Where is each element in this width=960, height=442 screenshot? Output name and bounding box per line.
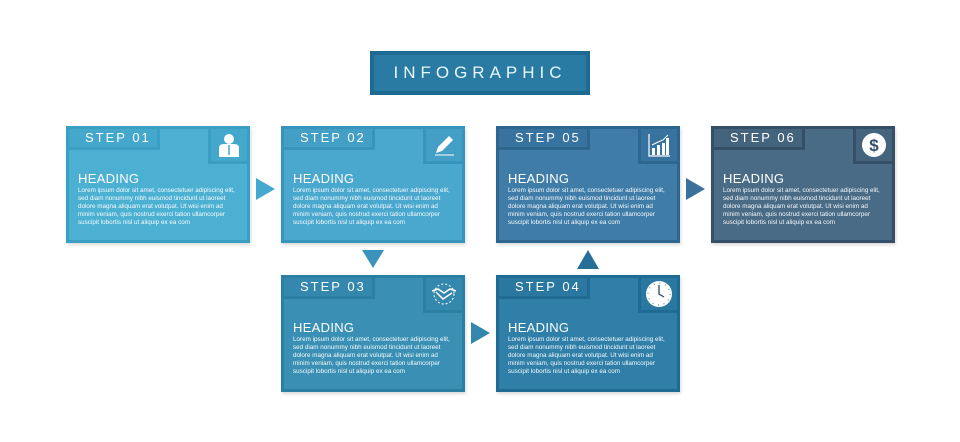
text: Lorem ipsum dolor sit amet, consectetuer adipiscing elit, — [293, 187, 450, 194]
text: dolore magna aliquam erat volutpat. Ut wisi enim ad — [508, 203, 653, 210]
text — [723, 187, 880, 226]
text: dolore magna aliquam erat volutpat. Ut wisi enim ad — [78, 203, 223, 210]
heading: HEADING — [723, 171, 784, 186]
text: minim veniam, quis nostrud exerci tation ullamcorper — [508, 211, 655, 218]
text: minim veniam, quis nostrud exerci tation ullamcorper — [293, 360, 440, 367]
step label 02 — [281, 126, 375, 150]
panel: step 01 — [66, 126, 250, 243]
text: dolore magna aliquam erat volutpat. Ut wisi enim ad — [293, 352, 438, 359]
text: suscipit lobortis nisl ut aliquip ex ea com — [508, 368, 620, 375]
step label 05 — [496, 126, 590, 150]
text — [508, 187, 665, 226]
text: Lorem ipsum dolor sit amet, consectetuer adipiscing elit, — [508, 187, 665, 194]
text — [293, 187, 450, 226]
heading: HEADING — [508, 320, 569, 335]
text: sed diam nonummy nibh euismod tincidunt ut laoreet — [293, 195, 440, 202]
panel: step 02 — [281, 126, 465, 243]
text: sed diam nonummy nibh euismod tincidunt ut laoreet — [293, 344, 440, 351]
text: Lorem ipsum dolor sit amet, consectetuer adipiscing elit, — [723, 187, 880, 194]
icon: pencil — [423, 126, 465, 164]
title: INFOGRAPHIC — [393, 63, 567, 82]
step label 03: STEP 03 — [300, 279, 366, 294]
step label 02: STEP 02 — [300, 130, 366, 145]
text: minim veniam, quis nostrud exerci tation ullamcorper — [508, 360, 655, 367]
icon: person — [208, 126, 250, 164]
step label 04: STEP 04 — [515, 279, 581, 294]
text: Lorem ipsum dolor sit amet, consectetuer adipiscing elit, — [293, 336, 450, 343]
step label 03 — [281, 275, 375, 299]
heading: HEADING — [508, 171, 569, 186]
text: dolore magna aliquam erat volutpat. Ut wisi enim ad — [508, 352, 653, 359]
text: Lorem ipsum dolor sit amet, consectetuer adipiscing elit, — [78, 187, 235, 194]
text: Lorem ipsum dolor sit amet, consectetuer adipiscing elit, — [508, 336, 665, 343]
arrow: 2 to 3 — [362, 250, 384, 268]
text: suscipit lobortis nisl ut aliquip ex ea com — [293, 368, 405, 375]
text: dolore magna aliquam erat volutpat. Ut wisi enim ad — [723, 203, 868, 210]
text: suscipit lobortis nisl ut aliquip ex ea com — [78, 219, 190, 226]
text: sed diam nonummy nibh euismod tincidunt ut laoreet — [723, 195, 870, 202]
step label 06 — [711, 126, 805, 150]
text: sed diam nonummy nibh euismod tincidunt ut laoreet — [78, 195, 225, 202]
heading: HEADING — [293, 320, 354, 335]
text: minim veniam, quis nostrud exerci tation ullamcorper — [293, 211, 440, 218]
text: minim veniam, quis nostrud exerci tation ullamcorper — [723, 211, 870, 218]
panel: step 04 — [496, 275, 680, 392]
heading: HEADING — [78, 171, 139, 186]
arrow: 3 to 4 — [471, 322, 490, 344]
panel: step 05 — [496, 126, 680, 243]
arrow: 4 to 5 — [577, 250, 599, 269]
title — [370, 51, 590, 95]
panel: step 06 — [711, 126, 895, 243]
text — [508, 336, 665, 375]
icon: handshake — [423, 275, 465, 313]
text: suscipit lobortis nisl ut aliquip ex ea com — [293, 219, 405, 226]
arrow: 1 to 2 — [256, 178, 275, 200]
text: sed diam nonummy nibh euismod tincidunt ut laoreet — [508, 344, 655, 351]
step label 01: STEP 01 — [85, 130, 151, 145]
text — [293, 336, 450, 375]
step label 06: STEP 06 — [730, 130, 796, 145]
step label 01 — [66, 126, 160, 150]
icon: dollar — [853, 126, 895, 164]
text: suscipit lobortis nisl ut aliquip ex ea com — [723, 219, 835, 226]
icon: clock — [638, 275, 680, 313]
text: dolore magna aliquam erat volutpat. Ut wisi enim ad — [293, 203, 438, 210]
step label 04 — [496, 275, 590, 299]
text — [78, 187, 235, 226]
icon: dollar: $ — [869, 136, 879, 155]
heading: HEADING — [293, 171, 354, 186]
icon: chart — [638, 126, 680, 164]
arrow: 5 to 6 — [686, 178, 705, 200]
text: suscipit lobortis nisl ut aliquip ex ea com — [508, 219, 620, 226]
step label 05: STEP 05 — [515, 130, 581, 145]
text: sed diam nonummy nibh euismod tincidunt ut laoreet — [508, 195, 655, 202]
text: minim veniam, quis nostrud exerci tation ullamcorper — [78, 211, 225, 218]
panel: step 03 — [281, 275, 465, 392]
